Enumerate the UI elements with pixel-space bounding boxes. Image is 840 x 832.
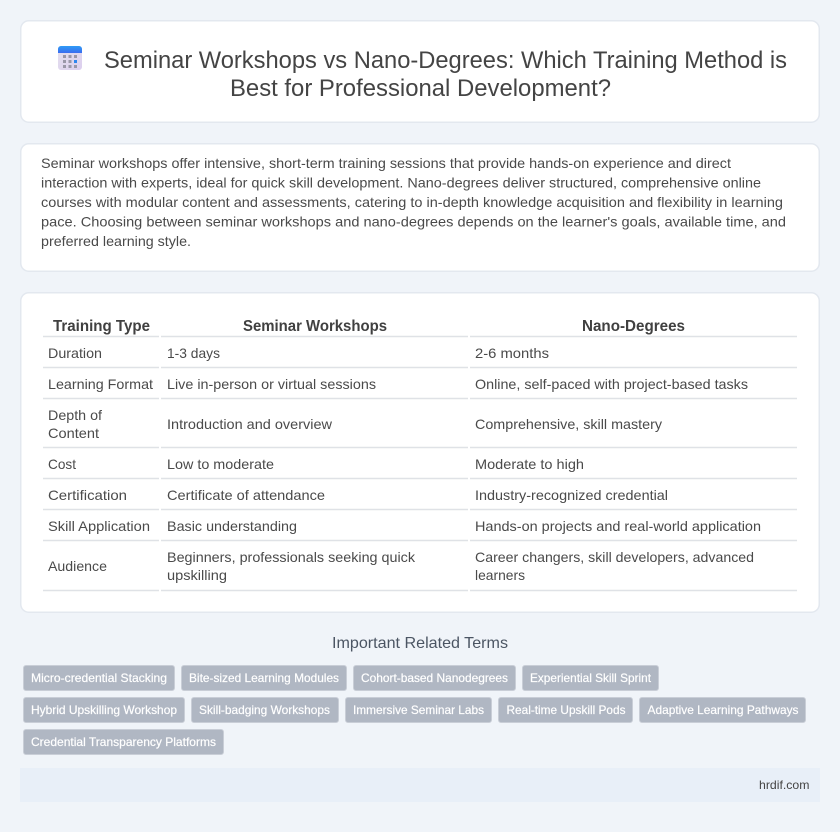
row: depth of content: Depth of bbox=[48, 407, 102, 423]
tag: Skill-badging Workshops bbox=[199, 703, 330, 717]
title bbox=[104, 47, 787, 102]
row: cost bbox=[48, 456, 584, 472]
row: depth of content: Comprehensive, skill mastery bbox=[475, 416, 662, 432]
tag bbox=[522, 666, 658, 690]
tag bbox=[24, 666, 174, 690]
row: duration: 2-6 months bbox=[475, 345, 549, 361]
row: audience: Beginners, professionals seeking quick bbox=[167, 549, 416, 565]
icon: calendar bbox=[58, 46, 82, 70]
panel: comparison table bbox=[21, 293, 819, 612]
panel: header bbox=[21, 21, 819, 122]
tag bbox=[354, 666, 516, 690]
row: skill application: Skill Application bbox=[48, 518, 150, 534]
row: learning format: Online, self-paced with project-based tasks bbox=[475, 376, 748, 392]
tag: Cohort-based Nanodegrees bbox=[361, 671, 508, 685]
related term tags bbox=[24, 666, 806, 754]
table header bbox=[53, 318, 685, 335]
table header: Nano-Degrees bbox=[582, 318, 685, 335]
row: audience: learners bbox=[475, 567, 525, 583]
row: duration: Duration bbox=[48, 345, 102, 361]
footer bbox=[20, 768, 820, 802]
panel: introduction text: interaction with experts, ideal for quick skill development. Nano-degrees deliver structured, comprehensive online bbox=[41, 174, 761, 190]
tag bbox=[24, 698, 184, 722]
tag: Credential Transparency Platforms bbox=[31, 735, 216, 749]
row: certification: Certificate of attendance bbox=[167, 487, 325, 503]
tag bbox=[192, 698, 338, 722]
row: skill application bbox=[48, 518, 761, 534]
row: duration: 1-3 days bbox=[167, 345, 220, 361]
heading: important related terms: Important Related Terms bbox=[332, 635, 508, 652]
panel: introduction text: Seminar workshops offer intensive, short-term training sessions that provide hands-on experience and direct bbox=[41, 155, 731, 171]
tag: Bite-sized Learning Modules bbox=[189, 671, 339, 685]
row: learning format bbox=[48, 376, 748, 392]
row: cost: Moderate to high bbox=[475, 456, 584, 472]
row: certification: Industry-recognized credential bbox=[475, 487, 668, 503]
panel: introduction text: preferred learning style. bbox=[41, 233, 191, 249]
title: Seminar Workshops vs Nano-Degrees: Which Training Method is bbox=[104, 47, 787, 74]
tag: Real-time Upskill Pods bbox=[506, 703, 626, 717]
tag bbox=[24, 730, 224, 754]
row: depth of content: Content bbox=[48, 425, 99, 441]
row: cost: Low to moderate bbox=[167, 456, 274, 472]
tag bbox=[182, 666, 346, 690]
row: duration bbox=[48, 345, 549, 361]
tag bbox=[498, 698, 632, 722]
panel: introduction text bbox=[21, 144, 819, 271]
table header: Training Type bbox=[53, 318, 150, 335]
row: depth of content: Introduction and overview bbox=[167, 416, 333, 432]
row: cost: Cost bbox=[48, 456, 76, 472]
row: depth of content bbox=[48, 407, 662, 441]
row: skill application: Hands-on projects and real-world application bbox=[475, 518, 761, 534]
tag bbox=[346, 698, 492, 722]
tag: Hybrid Upskilling Workshop bbox=[31, 703, 177, 717]
panel: introduction text: courses with modular content and assessments, catering to in-depth knowledge acquisition and flexibility in learning bbox=[41, 194, 783, 210]
row: certification bbox=[48, 487, 668, 503]
title: Best for Professional Development? bbox=[230, 75, 611, 102]
row: audience: upskilling bbox=[167, 567, 227, 583]
panel: introduction text: pace. Choosing between seminar workshops and nano-degrees depends on the learner's goals, available time, and bbox=[41, 214, 786, 230]
tag: Experiential Skill Sprint bbox=[530, 671, 652, 685]
row: certification: Certification bbox=[48, 487, 127, 503]
tag: Immersive Seminar Labs bbox=[353, 703, 484, 717]
row: learning format: Learning Format bbox=[48, 376, 153, 392]
row: learning format: Live in-person or virtual sessions bbox=[167, 376, 376, 392]
tag bbox=[640, 698, 806, 722]
footer: hrdif.com bbox=[759, 778, 810, 792]
tag: Micro-credential Stacking bbox=[31, 671, 167, 685]
row: audience bbox=[48, 549, 754, 583]
table header: Seminar Workshops bbox=[243, 318, 387, 335]
row: skill application: Basic understanding bbox=[167, 518, 297, 534]
tag: Adaptive Learning Pathways bbox=[648, 703, 798, 717]
row: audience: Career changers, skill developers, advanced bbox=[475, 549, 754, 565]
row: audience: Audience bbox=[48, 558, 107, 574]
